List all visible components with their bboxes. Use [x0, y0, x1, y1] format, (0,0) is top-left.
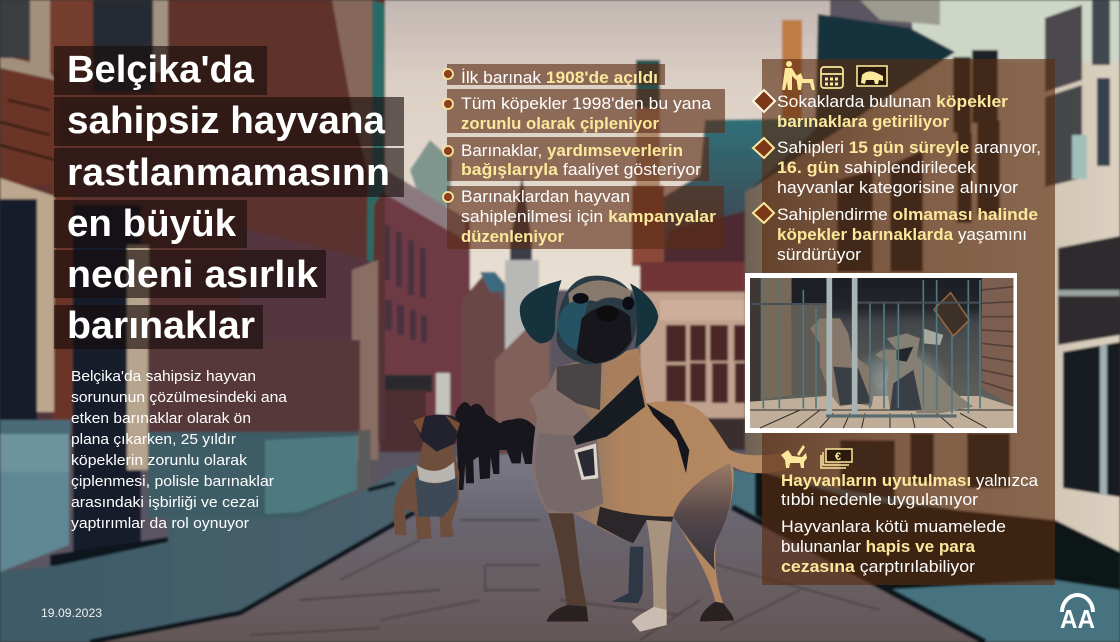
title text: [67, 49, 390, 347]
left sidewalk: [0, 455, 445, 642]
lamp tower: [632, 60, 664, 266]
date: 19.09.2023: [41, 606, 102, 620]
intro paragraph: arasındaki işbirliği ve cezai: [71, 495, 259, 511]
legal text: bulunanlar hapis ve para: [781, 537, 976, 556]
caged dogs right: [875, 333, 973, 413]
stone base: [0, 340, 360, 572]
small dog: [393, 415, 460, 539]
belly shadow: [597, 507, 673, 543]
ruff: [529, 388, 600, 437]
intro paragraph: etken barınaklar olarak ön: [71, 411, 251, 427]
fact text: Barınaklardan hayvan: [461, 187, 630, 206]
fact text: bağışlarıyla faaliyet gösteriyor: [461, 160, 701, 179]
icon: calendar: [821, 67, 843, 88]
legal text: cezasına çarptırılabiliyor: [781, 557, 975, 576]
centre right building: [640, 280, 750, 450]
title text: Belçika'da: [67, 49, 255, 91]
title: [54, 46, 404, 349]
process text: Sahipleri 15 gün süreyle aranıyor,: [777, 138, 1041, 157]
fact text: zorunlu olarak çipleniyor: [461, 114, 659, 133]
lower right front leg: [647, 520, 672, 610]
diamonds: [753, 90, 775, 223]
road: [90, 450, 985, 642]
upper and middle windows: [837, 50, 1010, 520]
far right windows: [1045, 0, 1120, 497]
far left buildings: [378, 165, 470, 445]
tree: [410, 140, 452, 215]
title text: sahipsiz hayvana: [67, 100, 386, 142]
icon: person with dog: [782, 61, 815, 90]
hind shading: [673, 463, 732, 570]
intro paragraph: çiplenmesi, polisle barınaklar: [71, 474, 274, 490]
church spire: [510, 176, 532, 300]
intro paragraph: yaptırımlar da rol oynuyor: [71, 516, 249, 532]
title text: barınaklar: [67, 305, 255, 347]
fact text: düzenleniyor: [461, 227, 564, 246]
hanging sign: [934, 293, 969, 336]
panel: shelter facts: [443, 64, 725, 249]
intro paragraph: [71, 369, 288, 532]
caged dog left: [810, 318, 875, 407]
photo: dogs in cage: [745, 273, 1017, 433]
process text: barınaklara getiriliyor: [777, 112, 949, 131]
right sidewalk: [732, 470, 1120, 642]
process text: 16. gün sahiplendirilecek: [777, 158, 977, 177]
legal text: Hayvanların uyutulması yalnızca: [781, 471, 1039, 490]
icon: caged animal: [857, 66, 887, 86]
title text: nedeni asırlık: [67, 254, 319, 296]
process text: Sahiplendirme olmaması halinde: [777, 205, 1038, 224]
fact text: Tüm köpekler 1998'den bu yana: [461, 94, 712, 113]
intro paragraph: köpeklerin zorunlu olarak: [71, 453, 248, 469]
intro paragraph: plana çıkarken, 25 yıldır: [71, 432, 236, 448]
main dog: [520, 276, 792, 632]
title text: rastlanmamasınn: [67, 152, 390, 194]
process text: [777, 92, 1041, 264]
process text: Sokaklarda bulunan köpekler: [777, 92, 1008, 111]
paws: [547, 605, 588, 622]
panel: shelter process: [753, 59, 1055, 585]
title background bars: [54, 46, 404, 349]
fact text: İlk barınak 1908'de açıldı: [461, 68, 658, 87]
process text: köpekler barınaklarda yaşamını: [777, 225, 1027, 244]
euro symbol: €: [835, 451, 841, 463]
chest shade: [535, 433, 603, 513]
bullets: [443, 69, 453, 202]
head: [557, 276, 637, 364]
title text: en büyük: [67, 203, 237, 245]
fact bars: [447, 64, 725, 249]
neck: [557, 360, 602, 410]
legal text: Hayvanlara kötü muamelede: [781, 517, 1006, 536]
icon: euro notes: [821, 449, 852, 468]
fact text: [461, 68, 716, 246]
front left leg shade: [548, 513, 587, 607]
brick and window block: [0, 0, 168, 560]
process text: sürdürüyor: [777, 245, 861, 264]
legal text: tıbbi nedenle uygulanıyor: [781, 490, 978, 509]
process text: hayvanlar kategorisine alınıyor: [777, 178, 1018, 197]
intro paragraph: sorununun çözülmesindeki ana: [71, 390, 288, 406]
left building wall: [0, 0, 385, 440]
dog far leg: [612, 547, 643, 603]
fact text: Barınaklar, yardımseverlerin: [461, 141, 683, 160]
legal text: [781, 471, 1039, 576]
logo: AA: AA: [1060, 604, 1095, 634]
right building facade: [745, 0, 1120, 560]
panel background: [762, 59, 1055, 585]
icon: dog with syringe: [781, 445, 807, 468]
harness: [573, 375, 645, 445]
fact text: sahiplenilmesi için kampanyalar: [461, 207, 716, 226]
dog body: [532, 348, 792, 632]
people in street: [455, 402, 537, 490]
intro paragraph: Belçika'da sahipsiz hayvan: [71, 369, 256, 385]
